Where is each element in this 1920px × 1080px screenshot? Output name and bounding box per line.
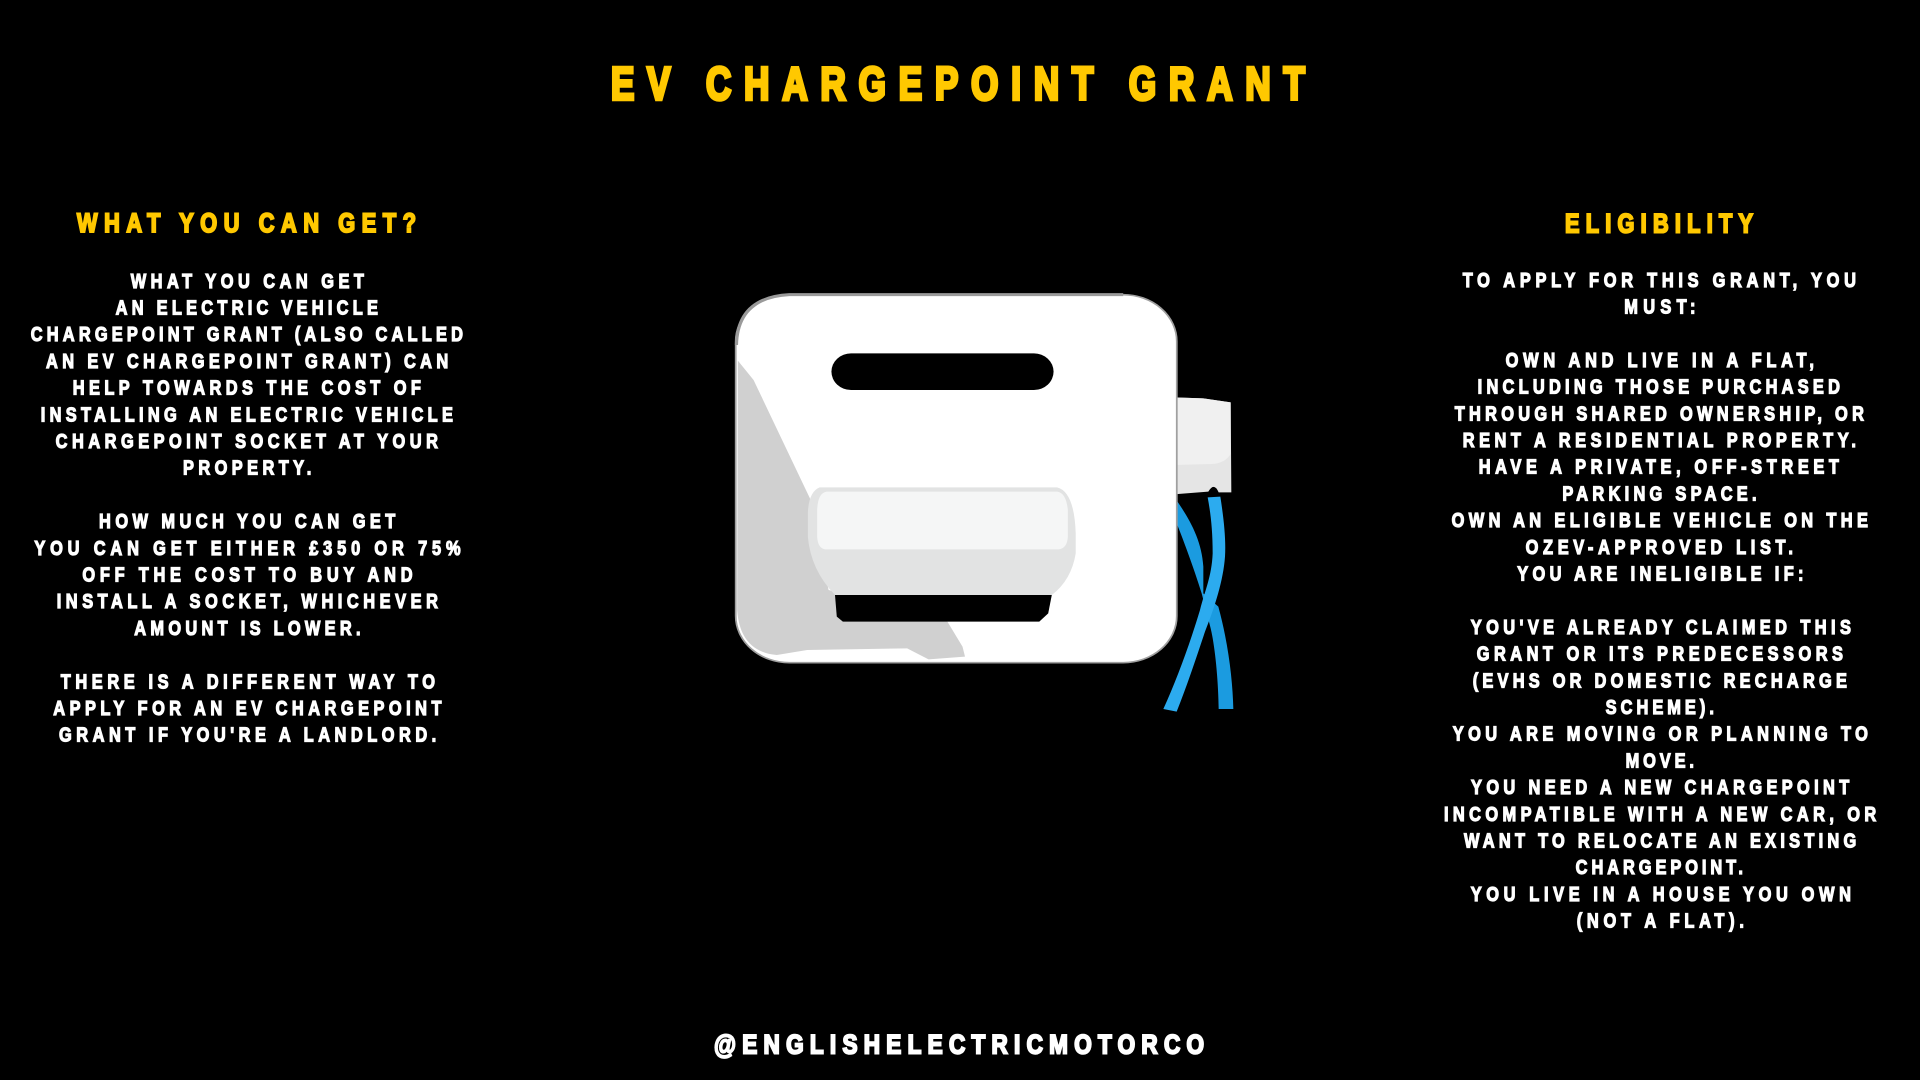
text block: what you can get body: PROPERTY. — [183, 456, 311, 479]
text block: ineligible conditions: YOU'VE ALREADY CLAIMED THIS — [1471, 615, 1851, 638]
text block: how much you can get: YOU CAN GET EITHER £350 OR 75% — [34, 536, 461, 559]
text block: must requirements: OWN AND LIVE IN A FLAT, — [1506, 348, 1814, 371]
socket top panel — [817, 492, 1068, 549]
text block: must requirements: PARKING SPACE. — [1562, 482, 1757, 505]
text block: how much you can get — [34, 509, 461, 639]
text block: how much you can get: AMOUNT IS LOWER. — [134, 616, 361, 639]
text block: what you can get body: AN EV CHARGEPOINT GRANT) CAN — [46, 349, 448, 372]
footer handle: @ENGLISHELECTRICMOTORCO — [714, 1031, 1204, 1060]
text block: must requirements: MUST: — [1624, 295, 1696, 318]
text block: ineligible conditions — [1444, 615, 1877, 932]
text block: ineligible conditions: GRANT OR ITS PREDECESSORS — [1477, 642, 1843, 665]
top-left rim highlight — [736, 295, 1123, 345]
text block: what you can get body: HELP TOWARDS THE COST OF — [73, 376, 421, 399]
text block: ineligible conditions: YOU NEED A NEW CHARGEPOINT — [1471, 775, 1850, 799]
text block: ineligible conditions: WANT TO RELOCATE AN EXISTING — [1464, 829, 1856, 852]
text block: ineligible conditions: SCHEME). — [1606, 695, 1714, 718]
text block: ineligible conditions: YOU ARE MOVING OR PLANNING TO — [1453, 722, 1868, 745]
text block: must requirements: OWN AN ELIGIBLE VEHICLE ON THE — [1452, 508, 1868, 532]
chargepoint body — [734, 293, 1178, 664]
icon: wall chargepoint with blue cables — [736, 295, 1233, 712]
socket housing — [808, 487, 1076, 595]
text block: must requirements: HAVE A PRIVATE, OFF-STREET — [1479, 455, 1840, 478]
text block: must requirements: RENT A RESIDENTIAL PROPERTY. — [1463, 428, 1856, 451]
text block: must requirements: TO APPLY FOR THIS GRANT, YOU — [1463, 268, 1856, 291]
heading: what you can get: WHAT YOU CAN GET? — [77, 209, 416, 239]
text block: what you can get body: CHARGEPOINT SOCKET AT YOUR — [56, 429, 438, 452]
text block: how much you can get: INSTALL A SOCKET, WHICHEVER — [57, 589, 438, 613]
text block: must requirements: OZEV-APPROVED LIST. — [1526, 535, 1793, 558]
panel: what you can get — [31, 209, 463, 746]
text block: how much you can get: HOW MUCH YOU CAN GET — [99, 509, 396, 533]
text block: must requirements — [1452, 268, 1868, 585]
text block: landlord note: THERE IS A DIFFERENT WAY TO — [61, 670, 435, 693]
text block: what you can get body: INSTALLING AN ELECTRIC VEHICLE — [41, 403, 453, 426]
panel: eligibility — [1444, 210, 1877, 932]
title: EV CHARGEPOINT GRANT — [611, 58, 1305, 110]
text block: ineligible conditions: (EVHS OR DOMESTIC RECHARGE — [1473, 669, 1847, 692]
text block: landlord note: APPLY FOR AN EV CHARGEPOINT — [53, 696, 442, 719]
text block: what you can get body: CHARGEPOINT GRANT (ALSO CALLED — [31, 322, 463, 346]
text block: must requirements: YOU ARE INELIGIBLE IF: — [1517, 562, 1804, 585]
text block: landlord note: GRANT IF YOU'RE A LANDLORD. — [59, 723, 436, 746]
text block: what you can get body: AN ELECTRIC VEHICLE — [116, 296, 378, 319]
text block: what you can get body — [31, 269, 463, 479]
text block: how much you can get: OFF THE COST TO BUY AND — [82, 563, 413, 586]
heading: eligibility: ELIGIBILITY — [1565, 210, 1753, 239]
display slot — [831, 353, 1054, 390]
text block: ineligible conditions: CHARGEPOINT. — [1576, 855, 1743, 879]
text block: ineligible conditions: INCOMPATIBLE WITH A NEW CAR, OR — [1444, 802, 1877, 825]
text block: ineligible conditions: YOU LIVE IN A HOUSE YOU OWN — [1471, 882, 1851, 905]
text block: landlord note — [53, 670, 442, 746]
shadow wedge — [737, 361, 965, 659]
text block: must requirements: THROUGH SHARED OWNERSHIP, OR — [1455, 402, 1864, 425]
plug housing and cables — [1163, 398, 1234, 712]
text block: ineligible conditions: MOVE. — [1626, 749, 1694, 772]
socket opening — [835, 595, 1052, 622]
text block: what you can get body: WHAT YOU CAN GET — [131, 269, 364, 292]
text block: must requirements: INCLUDING THOSE PURCHASED — [1478, 375, 1840, 398]
text block: ineligible conditions: (NOT A FLAT). — [1577, 909, 1744, 932]
